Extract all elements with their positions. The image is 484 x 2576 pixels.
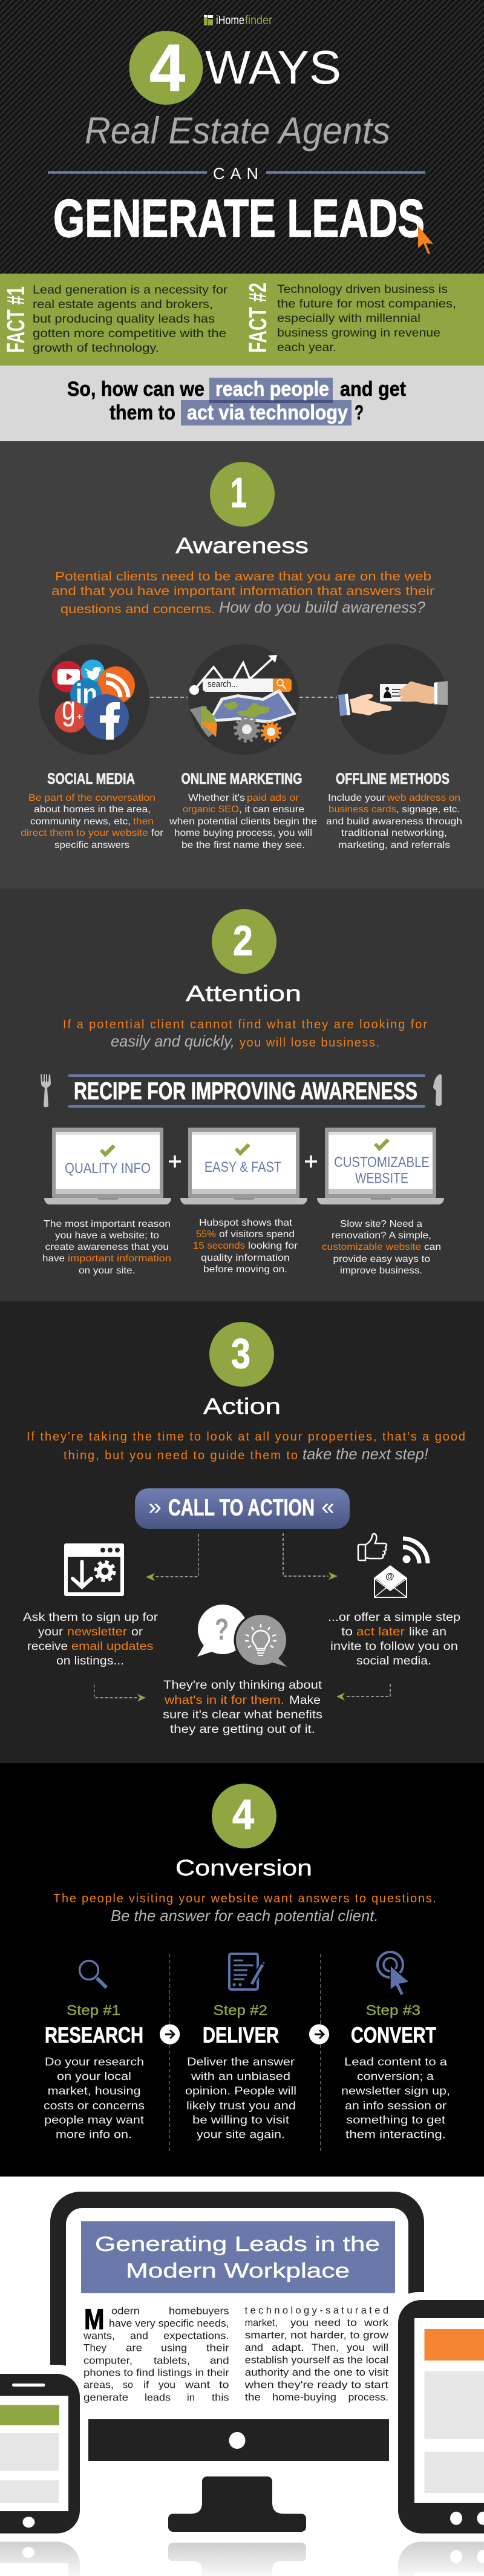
article column 1: you xyxy=(159,2380,175,2391)
article column 1: leads xyxy=(145,2393,171,2404)
intro text: Potential clients need to be aware that you are on the web xyxy=(55,570,431,583)
article column 2: to xyxy=(347,2318,357,2328)
text: customizable website: Slow site? Need a xyxy=(340,1219,422,1229)
call to action button xyxy=(135,1488,350,1529)
article column 1: have very specific needs, xyxy=(109,2318,229,2329)
title box xyxy=(81,2221,395,2293)
icon: social media: in xyxy=(76,678,97,709)
call to action button: « xyxy=(321,1494,335,1520)
text: offline methods: web address on xyxy=(387,793,460,803)
text: easy and fast: Hubspot shows that xyxy=(199,1218,293,1228)
text: online marketing: organic SEO xyxy=(183,804,239,815)
text: newsletter option: newsletter xyxy=(67,1626,128,1638)
step 2: be willing to visit xyxy=(192,2114,289,2126)
article column 1: homebuyers xyxy=(169,2306,229,2317)
article column 2: the xyxy=(245,2392,261,2403)
article column 2: work xyxy=(364,2318,389,2328)
fact 1 text: gotten more competitive with the xyxy=(33,327,226,340)
icon: social media xyxy=(39,644,149,755)
question text: ? xyxy=(355,401,364,424)
text: social option xyxy=(328,1611,460,1668)
step 3: Step #3 xyxy=(366,2002,420,2018)
text: social media: about homes in the area, xyxy=(34,804,151,815)
text: offline methods: Include your xyxy=(328,793,386,803)
step 2 xyxy=(185,2002,296,2141)
text: easy and fast: before moving on. xyxy=(203,1264,287,1275)
panel: section 4 conversion xyxy=(0,1763,484,2177)
question text: them to xyxy=(110,401,175,424)
article column 2: and xyxy=(245,2342,263,2353)
number 1 circle xyxy=(210,462,275,527)
fact 2 text: each year. xyxy=(277,341,336,354)
intro text xyxy=(51,570,434,616)
intro text: questions and concerns. xyxy=(60,603,215,616)
text: customizable website: renovation? A simple, xyxy=(332,1230,431,1241)
text: newsletter option: or xyxy=(131,1626,143,1638)
article column 2: home-buying xyxy=(272,2392,336,2403)
number 1 circle: 1 xyxy=(231,469,247,516)
article column 1: their xyxy=(206,2343,229,2354)
step 3 xyxy=(341,2002,450,2141)
text: customizable website: improve business. xyxy=(340,1266,422,1276)
text: benefits: They're only thinking about xyxy=(163,1679,322,1692)
article column 2: establish yourself as the local xyxy=(245,2355,388,2366)
article column 2: when they're ready to start xyxy=(244,2380,389,2391)
fact 1 label: FACT #1 xyxy=(2,286,30,353)
icon: browser window with download and gear xyxy=(64,1543,124,1596)
text: social media: for xyxy=(151,828,164,838)
text: benefits: Make xyxy=(289,1694,321,1707)
drop cap: M xyxy=(84,2303,104,2335)
step 1 xyxy=(44,2002,145,2141)
text: online marketing: , it can ensure xyxy=(239,804,304,815)
icon: knife xyxy=(433,1074,442,1106)
number 3 circle: 3 xyxy=(231,1330,250,1377)
laptop: customizable website: WEBSITE xyxy=(355,1171,408,1186)
step 2: DELIVER xyxy=(203,2023,279,2048)
intro text: If a potential client cannot find what they are looking for xyxy=(63,1018,427,1031)
text: social option: social media. xyxy=(356,1655,431,1668)
text: customizable website: can xyxy=(424,1242,441,1252)
panel: section 1 awareness xyxy=(0,441,484,889)
step 2: opinion. People will xyxy=(185,2085,296,2097)
step 3: newsletter sign up, xyxy=(341,2085,450,2097)
intro text xyxy=(53,1892,436,1925)
recipe banner xyxy=(68,1074,425,1108)
title box: Modern Workplace xyxy=(126,2259,350,2282)
question text: act via technology xyxy=(187,401,348,424)
text: easy and fast: 15 seconds xyxy=(193,1241,245,1251)
heading: Awareness: Awareness xyxy=(175,533,309,558)
step 2: likely trust you and xyxy=(186,2100,296,2112)
number 2 circle: 2 xyxy=(233,917,253,964)
icons: thumbs up, rss, email xyxy=(358,1534,428,1598)
article column 1: wants, xyxy=(83,2330,115,2341)
article column 2: need xyxy=(315,2318,341,2328)
text: newsletter option: on listings... xyxy=(56,1655,124,1668)
device reflections xyxy=(0,2542,484,2576)
text: newsletter option: receive xyxy=(27,1640,68,1653)
intro text: and that you have important information that answers their xyxy=(51,585,434,598)
title: Real Estate Agents: Real Estate Agents xyxy=(85,110,390,152)
question text: and get xyxy=(340,378,406,401)
step 3: CONVERT xyxy=(351,2023,436,2048)
fact 2 text xyxy=(277,283,456,354)
article column 1: areas, xyxy=(83,2380,114,2391)
laptop: easy and fast: EASY & FAST xyxy=(204,1159,281,1175)
panel: question banner xyxy=(0,366,484,441)
article column 1: so xyxy=(123,2380,133,2391)
text: easy and fast xyxy=(193,1218,298,1275)
fact 1 text xyxy=(33,283,228,355)
step 2: Step #2 xyxy=(213,2002,267,2018)
article column 1: want xyxy=(185,2380,210,2391)
article column 1: computer, xyxy=(83,2355,132,2366)
number 4 circle xyxy=(212,1784,276,1848)
step 1: Step #1 xyxy=(67,2002,120,2018)
text: social media: then xyxy=(133,816,154,827)
title: CAN with rules xyxy=(48,165,425,183)
icon: speech bubbles question and idea xyxy=(197,1605,288,1667)
step 3: them interacting. xyxy=(345,2129,446,2141)
title box: Generating Leads in the xyxy=(95,2233,380,2256)
text: easy and fast: looking for xyxy=(248,1241,298,1251)
question text xyxy=(67,378,406,424)
text: newsletter option: Ask them to sign up for xyxy=(23,1611,159,1624)
icon: orange cursor xyxy=(418,226,433,254)
intro text xyxy=(63,1018,427,1050)
intro text: easily and quickly, xyxy=(111,1032,235,1050)
article column 2: process. xyxy=(348,2392,388,2403)
text: online marketing: paid ads or xyxy=(247,793,299,803)
fact 2 text: the future for most companies, xyxy=(277,297,456,310)
icon: target and cursor xyxy=(378,1952,410,1996)
article column 2: authority and the one to visit xyxy=(245,2367,388,2378)
text: social media xyxy=(21,770,164,850)
article column 1: this xyxy=(212,2393,229,2404)
article column 1: expectations. xyxy=(163,2330,229,2341)
text: offline methods: marketing, and referrals xyxy=(338,840,450,850)
step 2: Deliver the answer xyxy=(187,2055,295,2068)
heading: Action: Action xyxy=(203,1394,281,1419)
step 1: more info on. xyxy=(56,2129,132,2141)
text: online marketing: be the first name they see. xyxy=(182,840,305,850)
text: social media: direct them to your website xyxy=(21,828,148,838)
tablet device xyxy=(389,2292,484,2542)
fact 2 label: FACT #2 xyxy=(244,283,272,353)
title number 4 in circle: 4 xyxy=(149,31,185,105)
article column 1: if xyxy=(143,2380,149,2391)
text: customizable website xyxy=(322,1219,441,1276)
arrow: right option to center xyxy=(336,1684,390,1701)
icons: thumbs up, rss, email: @ xyxy=(385,1571,394,1582)
question text: So, how can we xyxy=(67,378,204,401)
call to action button: CALL TO ACTION xyxy=(168,1495,315,1520)
text: benefits: they are getting out of it. xyxy=(170,1723,315,1736)
article column 1 xyxy=(83,2306,229,2404)
text: customizable website: customizable website xyxy=(322,1242,421,1252)
text: online marketing: Whether it's xyxy=(188,793,245,803)
fact 2 text: business growing in revenue xyxy=(277,326,440,340)
heading: Attention: Attention xyxy=(186,981,301,1006)
icon: social media: g xyxy=(62,689,76,727)
number 3 circle xyxy=(209,1322,274,1387)
logo: iHomefinder xyxy=(204,14,272,27)
number 2 circle xyxy=(212,909,276,974)
intro text: thing, but you need to guide them to xyxy=(64,1449,298,1462)
step 3: conversion; a xyxy=(357,2071,434,2083)
article column 2: will xyxy=(372,2342,388,2353)
heading: Conversion: Conversion xyxy=(175,1856,312,1881)
article column 1: and xyxy=(130,2330,148,2341)
article column 1: to xyxy=(219,2380,229,2391)
laptop: customizable website xyxy=(317,1128,444,1204)
intro text: Be the answer for each potential client. xyxy=(111,1907,379,1925)
article column 1: and xyxy=(210,2355,229,2366)
phone device xyxy=(0,2365,83,2542)
step 1: on your local xyxy=(57,2071,131,2083)
text: online marketing: home buying process, you will xyxy=(174,828,312,838)
icon: magnifier xyxy=(80,1961,106,1988)
text: customizable website: provide easy ways to xyxy=(333,1254,430,1264)
intro text: take the next step! xyxy=(302,1445,428,1463)
text: quality info: have xyxy=(42,1254,65,1264)
article column 1: They xyxy=(83,2343,107,2354)
text: online marketing: when potential clients begin the xyxy=(169,816,317,827)
article column 2: you xyxy=(290,2318,309,2328)
logo: iHomefinder: iHome xyxy=(216,14,244,27)
icon: online marketing: search... xyxy=(208,679,238,689)
step 1: Do your research xyxy=(45,2055,144,2068)
title: CAN with rules: CAN xyxy=(213,165,258,183)
number 4 circle: 4 xyxy=(232,1791,254,1838)
text: newsletter option: email updates xyxy=(71,1640,154,1653)
step 1: costs or concerns xyxy=(44,2100,145,2112)
panel: section 3 action xyxy=(0,1301,484,1763)
fact 2 text: especially with millennial xyxy=(277,312,420,325)
arrow: to right option xyxy=(283,1533,338,1580)
fact 1 text: growth of technology. xyxy=(33,341,159,355)
icon: arrow circle 2 xyxy=(309,2024,329,2045)
text: quality info: important information xyxy=(68,1254,171,1264)
text: benefits xyxy=(163,1679,322,1736)
icon: offline methods xyxy=(338,644,448,755)
fact 1 text: but producing quality leads has xyxy=(33,312,215,326)
step 3: Lead content to a xyxy=(344,2055,448,2068)
dashed dividers xyxy=(170,1954,321,2152)
article column 2: smarter, not harder, to grow xyxy=(245,2330,388,2341)
article column 2: technology-saturated xyxy=(245,2305,388,2316)
highlight boxes xyxy=(181,378,352,426)
text: quality info: you have a website; to xyxy=(55,1230,159,1241)
text: quality info: on your site. xyxy=(79,1266,136,1276)
fact 1 text: Lead generation is a necessity for xyxy=(33,283,228,297)
text: easy and fast: quality information xyxy=(201,1253,290,1263)
text: social option: act later xyxy=(356,1626,405,1638)
text: newsletter option: your xyxy=(38,1626,64,1638)
text: social media: specific answers xyxy=(54,840,129,850)
arrow: left option to center xyxy=(94,1684,146,1702)
icon: fork xyxy=(41,1074,51,1107)
title: WAYS: WAYS xyxy=(205,41,341,94)
fact 2 text: Technology driven business is xyxy=(277,283,448,296)
laptop: quality info: QUALITY INFO xyxy=(65,1160,151,1177)
step 3: something to get xyxy=(346,2114,445,2126)
step 2: your site again. xyxy=(197,2129,285,2141)
article column 1: phones to find listings in their xyxy=(83,2368,229,2379)
step 1: people may want xyxy=(44,2114,144,2126)
panel: section 2 attention xyxy=(0,889,484,1301)
icon: document and pen xyxy=(229,1954,264,1990)
article column 1: odern xyxy=(111,2306,140,2317)
header panel xyxy=(0,0,484,274)
dashed connectors xyxy=(150,697,337,698)
text: easy and fast: of visitors spend xyxy=(219,1229,295,1240)
text: easy and fast: 55% xyxy=(196,1229,216,1240)
text: social media: community news, etc, xyxy=(30,816,131,827)
article column 2: market, xyxy=(245,2318,278,2328)
text: benefits: sure it's clear what benefits xyxy=(163,1709,322,1721)
article column 2: Then, xyxy=(312,2342,339,2353)
article column 2: adapt. xyxy=(272,2342,304,2353)
text: online marketing xyxy=(169,770,317,850)
intro text: The people visiting your website want answers to questions. xyxy=(53,1892,436,1905)
article column 1: are xyxy=(126,2343,142,2354)
article column 2: you xyxy=(347,2342,365,2353)
step 2: with an unbiased xyxy=(191,2071,290,2083)
article column 1: in xyxy=(187,2393,195,2404)
intro text: How do you build awareness? xyxy=(219,598,426,616)
step 3: an info session or xyxy=(345,2100,446,2112)
question text: reach people xyxy=(215,378,329,401)
article column 2 xyxy=(244,2305,389,2403)
monitor frame xyxy=(50,2192,424,2532)
intro text: you will lose business. xyxy=(240,1036,379,1050)
logo: iHomefinder: finder xyxy=(245,14,272,27)
text: social option: invite to follow you on xyxy=(330,1640,458,1653)
intro text: If they're taking the time to look at all your properties, that's a good xyxy=(27,1430,465,1444)
text: social option: ...or offer a simple step xyxy=(328,1611,460,1624)
text: social media: SOCIAL MEDIA xyxy=(47,770,135,787)
step 1: RESEARCH xyxy=(45,2023,143,2048)
laptop: quality info xyxy=(44,1128,171,1204)
panel: facts xyxy=(0,274,484,366)
arrow: to left option xyxy=(146,1534,198,1581)
laptop: customizable website: CUSTOMIZABLE xyxy=(334,1154,430,1171)
text: offline methods: business cards xyxy=(329,804,396,815)
article column 1: generate xyxy=(83,2393,128,2404)
call to action button: » xyxy=(148,1494,162,1520)
article column 1: tablets, xyxy=(154,2355,190,2366)
step 1: market, housing xyxy=(48,2085,141,2097)
plus sign xyxy=(305,1155,317,1168)
text: online marketing: ONLINE MARKETING xyxy=(182,770,302,787)
icon: speech bubbles question and idea: ? xyxy=(215,1612,229,1646)
plus sign xyxy=(169,1155,181,1168)
text: offline methods xyxy=(326,770,462,850)
icon: online marketing xyxy=(189,644,299,755)
text: social option: like an xyxy=(409,1626,446,1638)
text: offline methods: , signage, etc. xyxy=(396,804,460,815)
text: social option: to xyxy=(341,1626,353,1638)
panel: modern workplace devices xyxy=(0,2177,484,2576)
title number 4 in circle xyxy=(129,31,203,105)
text: quality info: The most important reason xyxy=(44,1219,171,1229)
icon: arrow circle 1 xyxy=(160,2024,180,2045)
text: offline methods: and build awareness through xyxy=(326,816,462,827)
article column 1: using xyxy=(161,2343,187,2354)
intro text xyxy=(27,1430,465,1463)
icon: social media: + xyxy=(77,712,82,722)
text: benefits: what's in it for them. xyxy=(164,1694,284,1707)
text: social media: Be part of the conversation xyxy=(28,793,155,803)
text: quality info: create awareness that you xyxy=(45,1242,169,1252)
laptop: easy and fast xyxy=(180,1128,307,1204)
text: offline methods: traditional networking, xyxy=(341,828,447,838)
fact 1 text: real estate agents and brokers, xyxy=(33,298,213,311)
text: offline methods: OFFLINE METHODS xyxy=(336,770,450,787)
text: newsletter option xyxy=(23,1611,159,1668)
text: quality info xyxy=(42,1219,171,1276)
